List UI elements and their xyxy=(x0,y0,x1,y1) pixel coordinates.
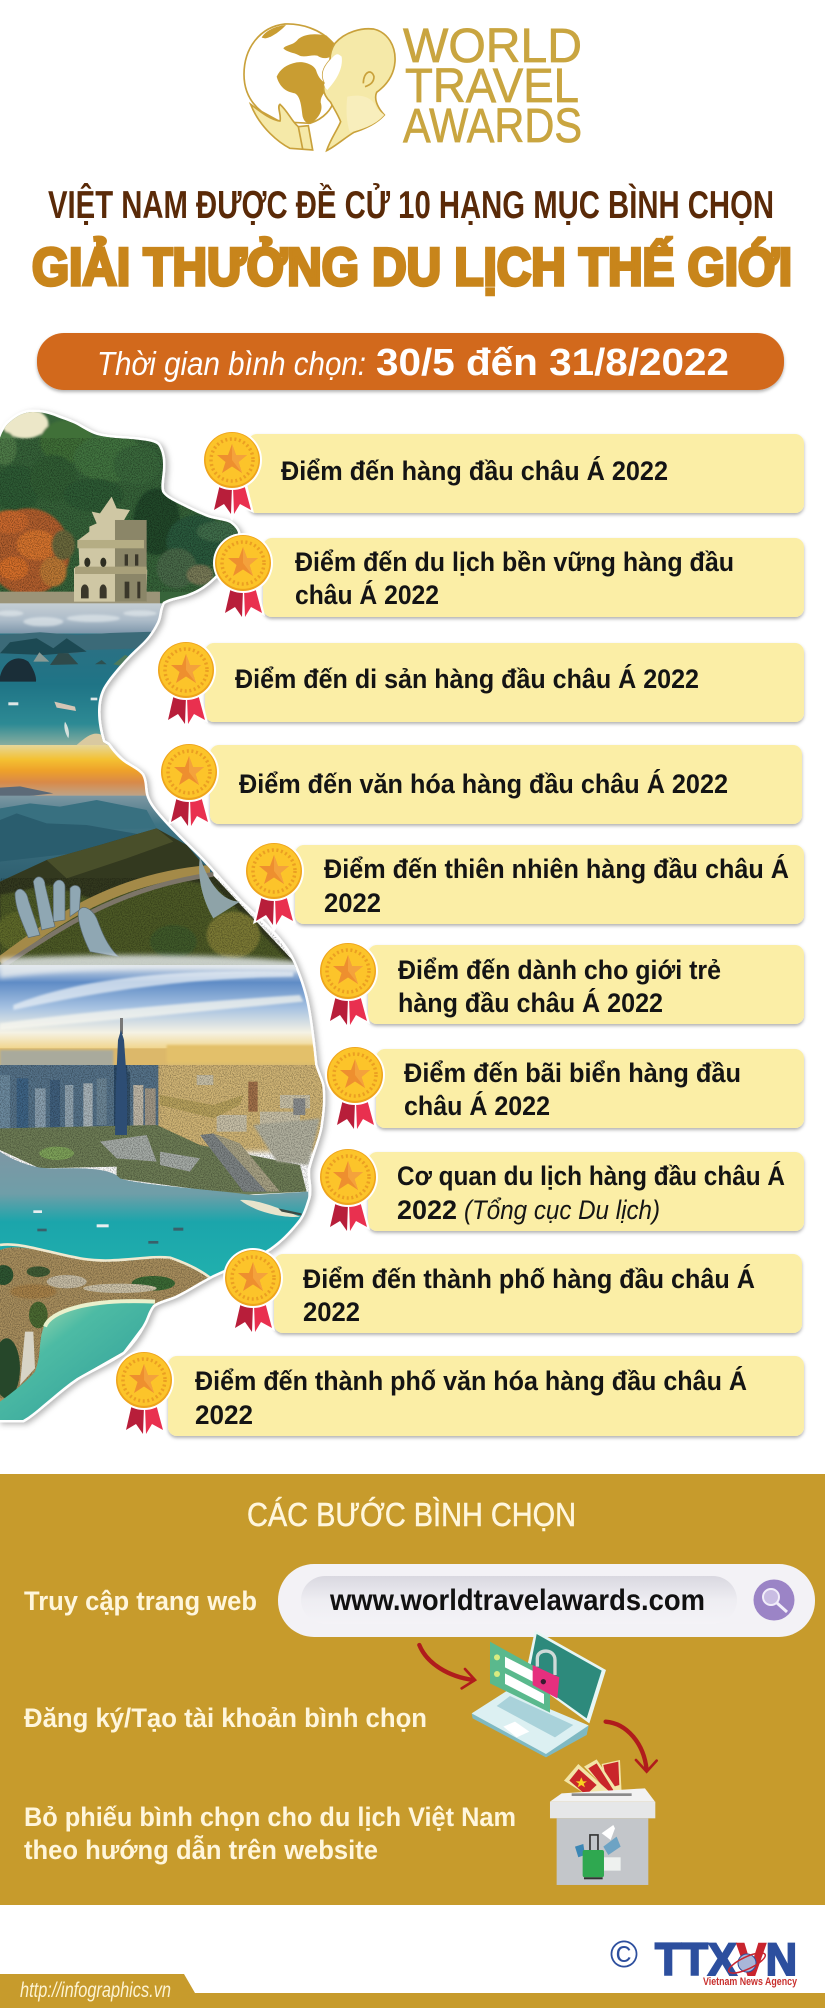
award item 7 xyxy=(325,1045,804,1136)
award item 1 xyxy=(202,430,804,521)
award item 10 xyxy=(114,1350,804,1441)
voting period pill xyxy=(37,333,784,390)
award item 6 xyxy=(318,941,804,1032)
photo: Golden Bridge at Ba Na Hills xyxy=(0,828,300,972)
footer: TTXVN logo: Vietnam News Agency xyxy=(703,1976,798,1988)
icon: magnifier xyxy=(754,1580,794,1620)
award item 4: Điểm đến văn hóa hàng đầu châu Á 2022 xyxy=(239,768,728,799)
award item 5 xyxy=(244,841,804,932)
arrow: laptop to ballot box xyxy=(606,1722,657,1772)
icon: laptop with login form xyxy=(472,1630,606,1757)
map of Vietnam with photo collage xyxy=(0,405,323,1422)
photo: city skyline xyxy=(0,1065,323,1195)
landmark tower xyxy=(115,1018,127,1135)
award item 5: Điểm đến thiên nhiên hàng đầu châu Á xyxy=(324,853,789,884)
search bar xyxy=(278,1564,815,1637)
list of 10 award categories xyxy=(114,430,804,1441)
footer band with website: http://infographics.vn xyxy=(20,1979,171,2002)
award item 2: Điểm đến du lịch bền vững hàng đầu xyxy=(295,547,734,577)
award item 3 xyxy=(156,640,804,731)
logo wordmark: TRAVEL xyxy=(405,60,579,113)
award item 2: châu Á 2022 xyxy=(295,579,439,610)
award item 5: 2022 xyxy=(324,888,381,918)
award item 8 xyxy=(318,1147,804,1238)
heading: voting steps: CÁC BƯỚC BÌNH CHỌN xyxy=(247,1496,576,1533)
award item 10: Điểm đến thành phố văn hóa hàng đầu châu Á xyxy=(195,1365,747,1396)
orange flame tree xyxy=(0,508,75,595)
logo wordmark: WORLD xyxy=(403,20,582,73)
award item 1: Điểm đến hàng đầu châu Á 2022 xyxy=(281,455,668,486)
search bar: www.worldtravelawards.com xyxy=(329,1584,705,1617)
arrow: search to laptop xyxy=(419,1645,475,1688)
icon: ballot box xyxy=(550,1759,655,1885)
award item 9: 2022 xyxy=(303,1297,360,1327)
footer band with website xyxy=(0,1974,825,2008)
footer: copyright mark: © xyxy=(610,1934,638,1976)
award item 8: 2022 xyxy=(397,1195,457,1225)
logo: World Travel Awards xyxy=(244,20,582,153)
step 1 label: Truy cập trang web xyxy=(24,1586,257,1616)
award item 6: hàng đầu châu Á 2022 xyxy=(398,987,663,1018)
step 3 label: theo hướng dẫn trên website xyxy=(24,1834,378,1865)
photo: Phu Quoc resort beach xyxy=(0,1238,213,1422)
award item 7: Điểm đến bãi biển hàng đầu xyxy=(404,1058,741,1088)
award item 8: Cơ quan du lịch hàng đầu châu Á xyxy=(397,1160,785,1191)
photo: hazy mountains xyxy=(0,796,214,882)
award item 8: (Tổng cục Du lịch) xyxy=(464,1195,660,1225)
award item 4 xyxy=(159,742,802,833)
award item 9 xyxy=(223,1248,802,1339)
voting period pill: 30/5 đến 31/8/2022 xyxy=(376,342,729,384)
award item 7: châu Á 2022 xyxy=(404,1090,550,1121)
photo: sunset xyxy=(0,745,153,797)
award item 9: Điểm đến thành phố hàng đầu châu Á xyxy=(303,1263,755,1294)
logo wordmark: AWARDS xyxy=(403,100,582,153)
step 3 label xyxy=(24,1802,516,1865)
voting period pill: Thời gian bình chọn: xyxy=(97,345,366,382)
step 2 label: Đăng ký/Tạo tài khoản bình chọn xyxy=(24,1703,427,1733)
award item 6: Điểm đến dành cho giới trẻ xyxy=(398,955,721,985)
icon: globe and head emblem xyxy=(244,24,395,151)
footer: TTXVN logo: TTXVN xyxy=(655,1934,797,1985)
photo: Ha Long Bay xyxy=(0,603,167,747)
logo wordmark xyxy=(403,20,582,153)
award item 10: 2022 xyxy=(195,1400,253,1430)
photo: Hanoi Turtle Tower xyxy=(0,405,253,608)
panel: voting steps xyxy=(0,1474,825,1905)
award item 2 xyxy=(213,533,804,624)
photo: sky over Ho Chi Minh City xyxy=(0,955,323,1092)
award item 3: Điểm đến di sản hàng đầu châu Á 2022 xyxy=(235,663,699,694)
photo: river and turquoise sea xyxy=(0,1152,308,1292)
step 3 label: Bỏ phiếu bình chọn cho du lịch Việt Nam xyxy=(24,1802,516,1832)
Turtle Tower xyxy=(74,497,147,602)
